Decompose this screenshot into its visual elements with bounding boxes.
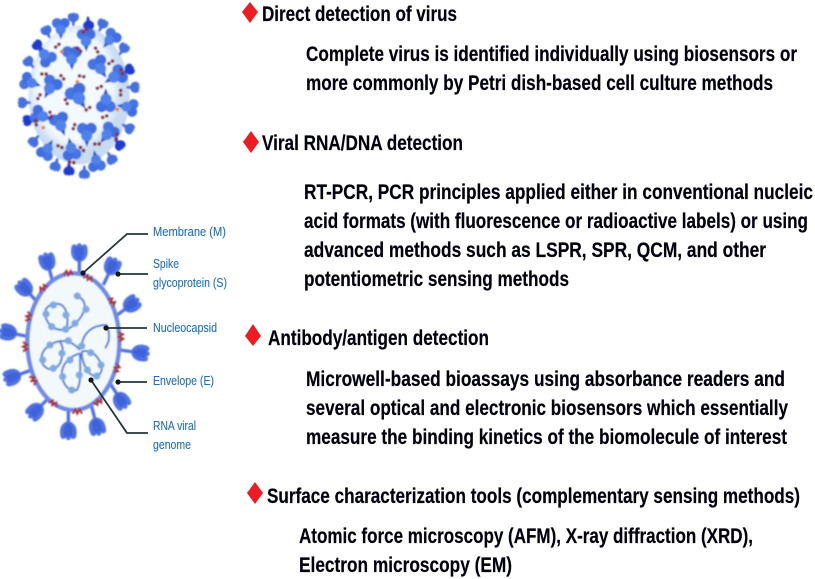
heading: viral RNA/DNA detection: Viral RNA/DNA detection bbox=[262, 132, 463, 155]
leader line: envelope bbox=[118, 381, 147, 383]
leader dot: envelope bbox=[115, 379, 121, 385]
label: spike glycoprotein: Spike bbox=[153, 257, 179, 271]
icon: red diamond bullet bbox=[243, 131, 259, 153]
text: direct detection description bbox=[306, 43, 797, 95]
text: surface tools description bbox=[299, 525, 753, 577]
icon: red diamond bullet bbox=[245, 324, 261, 346]
label: nucleocapsid: Nucleocapsid bbox=[153, 321, 217, 335]
label: envelope: Envelope (E) bbox=[153, 374, 214, 388]
heading: antibody/antigen detection: Antibody/antigen detection bbox=[268, 327, 489, 350]
leader line: membrane bbox=[83, 234, 148, 273]
icon: virus cross-section bbox=[0, 243, 151, 440]
text: RNA/DNA description: potentiometric sensing methods bbox=[304, 268, 569, 291]
label: RNA viral genome: genome bbox=[153, 438, 191, 452]
leader dot: nucleocapsid bbox=[103, 325, 109, 331]
diagram: labelled coronavirus cross-section bbox=[0, 225, 227, 452]
leader line: spike glycoprotein bbox=[118, 273, 148, 275]
text: surface tools description: Electron microscopy (EM) bbox=[299, 554, 512, 577]
panel: direct detection bbox=[242, 2, 797, 95]
text: antibody description bbox=[306, 368, 788, 449]
panel: surface characterization tools bbox=[247, 482, 800, 577]
label: membrane: Membrane (M) bbox=[153, 225, 226, 239]
label: spike glycoprotein bbox=[153, 257, 227, 290]
icon: red diamond bullet bbox=[247, 482, 263, 504]
leader dot: spike glycoprotein bbox=[115, 271, 121, 277]
icon: red diamond bullet bbox=[242, 2, 258, 23]
label: RNA viral genome: RNA viral bbox=[153, 419, 196, 433]
text: RNA/DNA description bbox=[304, 181, 813, 291]
leader dot: RNA viral genome bbox=[88, 377, 94, 383]
icon: coronavirus 3D illustration bbox=[17, 12, 140, 179]
leader dot: membrane bbox=[80, 270, 86, 276]
heading: direct detection of virus: Direct detection of virus bbox=[262, 3, 457, 26]
panel: viral RNA/DNA detection bbox=[243, 131, 813, 291]
label: RNA viral genome bbox=[153, 419, 196, 452]
label: spike glycoprotein: glycoprotein (S) bbox=[153, 276, 227, 290]
panel: antibody/antigen detection bbox=[245, 324, 788, 449]
leader line: nucleocapsid bbox=[106, 327, 147, 329]
leader line: RNA viral genome bbox=[91, 380, 148, 433]
